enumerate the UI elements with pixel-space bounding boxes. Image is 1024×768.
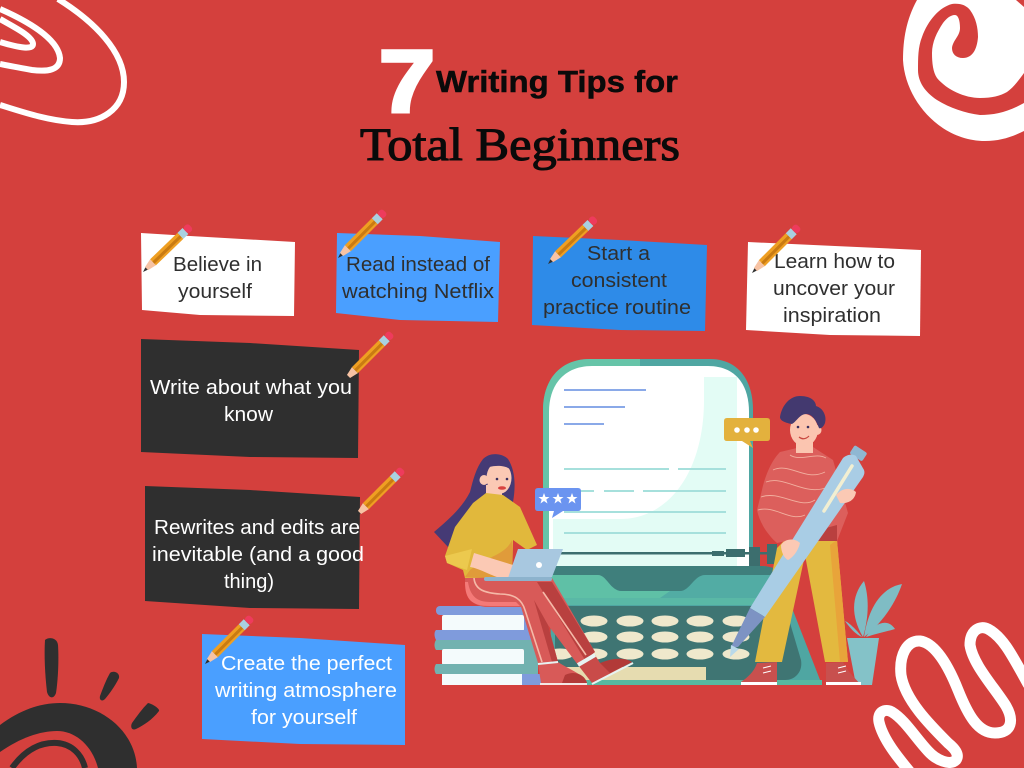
pants (465, 578, 595, 665)
giant pen (730, 445, 867, 657)
tip 7 text: Create the perfect (221, 653, 392, 675)
sweater (757, 447, 848, 543)
illustration: typewriter and writers (434, 359, 902, 685)
tip card 3: Start a consistent practice routine (532, 215, 707, 331)
man with giant pen (724, 396, 867, 685)
rating bubble (535, 488, 581, 518)
keyboard housing (549, 566, 822, 685)
tip 1 text: yourself (178, 281, 252, 303)
icon: pencil 5 (342, 330, 395, 383)
icon: pencil 3 (545, 215, 598, 267)
tip card 2: Read instead of watching Netflix (335, 208, 500, 322)
tip 4 text: uncover your (773, 278, 895, 300)
tip 6 text: thing) (224, 571, 274, 593)
decoration: top-left white swirl (0, 0, 124, 122)
tip 7 text (214, 653, 397, 729)
icon: pencil 6 (353, 466, 406, 519)
paper sheet (549, 366, 749, 566)
tip 5 text: Write about what you (150, 377, 352, 399)
tip 1 text (173, 254, 262, 303)
shoes (538, 655, 633, 685)
book stack (434, 606, 542, 685)
woman with laptop (434, 454, 633, 685)
icon: pencil 7 (202, 614, 255, 667)
hair (434, 454, 515, 547)
typewriter (543, 359, 822, 685)
shoes (741, 662, 861, 685)
paper frame (543, 359, 753, 570)
arm and hand (470, 553, 513, 578)
tip 3 text (543, 243, 691, 319)
sweater (445, 493, 537, 578)
title (360, 32, 680, 171)
tip 7 text: writing atmosphere (214, 680, 397, 702)
tip 2 text: watching Netflix (341, 281, 494, 303)
tip card 6: Rewrites and edits are inevitable (145, 466, 406, 609)
tip card 5: Write about what you know (141, 330, 395, 458)
tip 4 text: Learn how to (774, 251, 895, 273)
tip 5 text: know (224, 404, 274, 426)
tip 6 text: Rewrites and edits are (154, 517, 360, 539)
decoration: bottom-right white squiggle (879, 628, 1024, 768)
laptop (484, 549, 563, 581)
roller rod (553, 544, 783, 566)
tip 3 text: consistent (571, 270, 667, 292)
tip 6 text (152, 517, 364, 593)
title numeral 7: 7 (379, 32, 435, 131)
tip 4 text: inspiration (783, 305, 881, 327)
trousers (755, 540, 848, 662)
title line: Total Beginners: Total Beginners (360, 119, 680, 171)
plant (845, 581, 902, 685)
paper tray (557, 667, 706, 680)
paper lines (564, 390, 726, 533)
sweater stripes (758, 455, 828, 517)
chat bubble (724, 418, 770, 448)
tip 1 text: Believe in (173, 254, 262, 276)
icon: pencil 4 (749, 223, 802, 276)
icon: pencil 1 (140, 223, 193, 275)
keys (546, 616, 750, 660)
tip card 1: Believe in yourself (140, 223, 295, 316)
tip 7 text: for yourself (251, 707, 357, 729)
head (780, 396, 826, 453)
tip 2 text (341, 254, 494, 303)
tip 6 text: inevitable (and a good (152, 544, 364, 566)
decoration: bottom-left dark sun (0, 638, 159, 768)
tip 3 text: practice routine (543, 297, 691, 319)
decoration: top-right white spiral (903, 0, 1024, 141)
tip 4 text (773, 251, 895, 327)
icon: pencil 2 (335, 208, 388, 261)
tip 5 text (150, 377, 352, 426)
tip 2 text: Read instead of (346, 254, 490, 276)
title line: Writing Tips for: Writing Tips for (436, 64, 678, 99)
face (480, 461, 512, 497)
tip card 4: Learn how to uncover your inspiration (746, 223, 921, 336)
hands (781, 539, 800, 560)
tip card 7: Create the perfect writing atmosphere (202, 614, 405, 745)
tip 3 text: Start a (587, 243, 651, 265)
